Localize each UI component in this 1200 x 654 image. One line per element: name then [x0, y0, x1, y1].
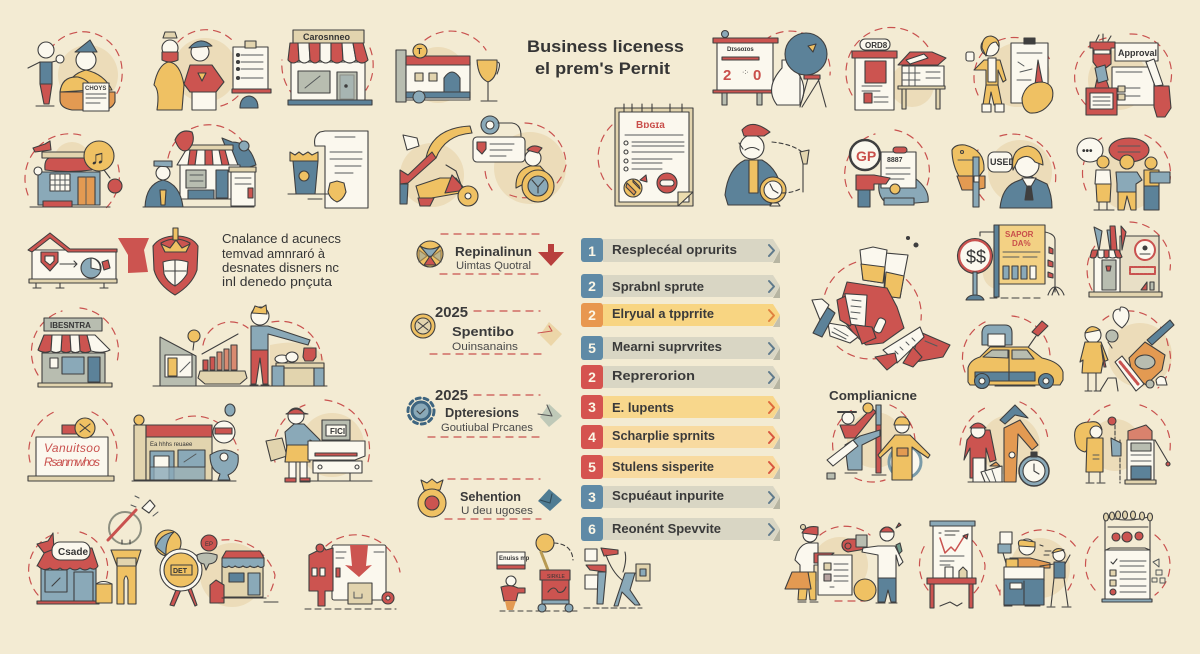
milestone 3: Goutiubal Prcanes — [441, 422, 534, 434]
icon: price sign and notice board: $$ — [966, 247, 986, 267]
icon: cyclist delivery with permit bubble and gear — [400, 116, 566, 207]
title: el prem's Pernit — [535, 60, 671, 78]
icon: growth chart and man at desk — [153, 305, 327, 387]
milestone 4: U deu ugoses — [461, 505, 534, 517]
item 3: 2 — [588, 307, 596, 323]
icon: billboard with flask and globe: Dɪsɢoɪos — [727, 47, 754, 53]
icon: price sign and notice board — [958, 225, 1064, 300]
icon: magnifier and document: 8887 — [887, 157, 903, 164]
milestone 1: Repinalinun — [455, 244, 532, 259]
icon: billboard with flask and globe: 2 — [723, 67, 731, 84]
icon: poster and market stall — [846, 27, 946, 110]
panel: milestones left column — [408, 234, 564, 519]
icon: poster and market stall: ORD8 — [865, 41, 888, 50]
icon: magnifier over yellow pillar — [108, 496, 158, 604]
icon: spiral notebook permit — [598, 104, 693, 206]
title — [527, 38, 684, 78]
icon: price sign and notice board: SAPOR — [1005, 230, 1034, 239]
item 4: Mearni suprvrites — [612, 339, 722, 354]
milestone 4 — [418, 479, 562, 519]
icon: price sign and notice board: DA% — [1012, 239, 1031, 248]
icon: consultant woman with bubble: USED — [990, 157, 1016, 167]
icon: approval paperwork — [1075, 34, 1172, 117]
icon: worker with orange arch and clock — [960, 402, 1049, 486]
item 8: Stulens sisperite — [612, 459, 714, 474]
icon: post office storefront with bust — [132, 404, 238, 481]
item 3 — [581, 303, 780, 327]
icon: clerk behind counter with child — [996, 530, 1078, 607]
item 9: Scpuéaut inpurite — [612, 488, 724, 503]
panel: numbered list — [581, 238, 780, 541]
item 5: 2 — [588, 369, 596, 385]
icon: crowned bin and checklist — [288, 131, 368, 208]
icon: magnifier and document — [845, 130, 929, 207]
item 7: 4 — [588, 429, 596, 445]
item 4: 5 — [588, 340, 596, 356]
milestone 2: Spentibo — [452, 324, 514, 339]
icon: shop with man and balloon — [143, 125, 256, 207]
icon: red kiosk with arrow and box — [305, 535, 400, 609]
icon: billboard with flask and globe: ·:· — [742, 69, 749, 76]
item 5 — [581, 365, 780, 389]
icon: worker and press machine — [266, 400, 372, 482]
item 1: Resplecéal oprurits — [612, 242, 737, 257]
text block: description: temvad amnraró à — [222, 246, 326, 261]
icon: target stand with shop: DET — [173, 568, 188, 575]
text block: description: inl denedo pnçuta — [222, 274, 333, 289]
milestone 3: Dpteresions — [445, 405, 519, 420]
milestone 2: 2025 — [435, 305, 468, 321]
icon: billboard with flask and globe — [713, 30, 830, 107]
icon: woman with arcade kiosk — [1075, 405, 1170, 484]
icon: shop trailer and goblet — [396, 31, 500, 103]
icon: person, cart and worker at the bottom — [497, 534, 650, 612]
text block: description: desnates disners nc — [222, 260, 340, 275]
icon: music shop — [25, 134, 122, 208]
icon: consultant woman with bubble — [952, 134, 1056, 208]
item 10: Reonént Spevvite — [612, 521, 721, 536]
icon: corner store: IBESNTRA — [50, 321, 91, 330]
item 6 — [581, 395, 780, 419]
icon: music shop: ♫ — [90, 147, 105, 169]
icon: person with clipboard and potato — [966, 36, 1053, 113]
icon: corner store — [31, 308, 118, 387]
milestone 1: Uimtas Quotral — [456, 260, 531, 272]
icon: person, cart and worker at the bottom: Enuiss mp — [499, 556, 530, 562]
text block: description — [222, 231, 341, 289]
milestone 1 — [417, 234, 564, 274]
icon: red script sign with crown: Rsanmwhos — [44, 455, 100, 469]
shield crest — [153, 228, 198, 295]
icon: storefront with sign: Carosnneo — [303, 32, 351, 42]
item 10 — [581, 517, 780, 541]
icon: trade shop: Csade — [58, 547, 88, 558]
icon: trade shop — [29, 532, 112, 604]
item 2: Sprabnl sprute — [612, 279, 704, 294]
milestone 3: 2025 — [435, 388, 468, 404]
title: Business liceness — [527, 38, 684, 56]
item 7 — [581, 425, 780, 449]
icon: man with clock and lamp — [725, 124, 809, 206]
icon: flip chart on red table — [919, 521, 985, 608]
icon: shop with emblem — [1087, 222, 1170, 297]
icon: spiral notebook permit: Bɒɢɪa — [636, 120, 665, 131]
icon: storefront with sign — [282, 30, 373, 105]
item 1: 1 — [588, 243, 596, 259]
icon: garland checklist document — [1085, 511, 1170, 602]
item 10: 6 — [588, 521, 596, 537]
item 9: 3 — [588, 489, 596, 505]
item 5: Reprerorion — [612, 368, 695, 383]
text block: description: Cnalance d acunecs — [222, 231, 341, 246]
item 2: 2 — [588, 278, 596, 294]
icon: approval paperwork: Approval — [1118, 48, 1157, 58]
icon: worker and press machine: FICI — [330, 427, 345, 436]
icon: red script sign with crown: Vanuitsoo — [44, 441, 100, 455]
icon: shopper and officer with document — [785, 523, 903, 603]
milestone 4: Sehention — [460, 489, 521, 504]
milestone 3 — [408, 388, 562, 437]
item 6: 3 — [588, 399, 596, 415]
item 1 — [581, 238, 780, 263]
icon: two workers with wheel and pole — [827, 403, 930, 482]
item 2 — [581, 274, 780, 298]
icon: billboard with flask and globe: 0 — [753, 67, 761, 84]
icon: woman and tool machine — [1080, 307, 1174, 391]
item 8: 5 — [588, 459, 596, 475]
item 4 — [581, 336, 780, 360]
milestone 2 — [411, 305, 562, 354]
milestone 2: Ouinsanains — [452, 341, 519, 353]
icon: three people with speech bubbles: ••• — [1082, 146, 1093, 157]
item 3: Elryual a tpprrite — [612, 306, 714, 321]
icon: officer with burger and document: CHOYS — [85, 86, 106, 92]
icon: shop trailer and goblet: T — [417, 47, 422, 56]
icon: three people with speech bubbles — [1077, 135, 1170, 210]
item 7: Scharplie sprnits — [612, 428, 715, 443]
item 8 — [581, 455, 780, 479]
icon: red script sign with crown — [28, 412, 117, 481]
icon: red gloved hand holding documents — [812, 236, 950, 370]
icon: house with shield and flag — [28, 228, 198, 295]
icon: person, cart and worker at the bottom: SIRKLE — [547, 574, 565, 580]
item 9 — [581, 485, 780, 509]
item 6: E. lupents — [612, 400, 674, 415]
icon: target stand with shop — [155, 530, 278, 607]
icon: post office storefront with bust: Ea hhhs reuaee — [150, 442, 193, 448]
icon: two people and clipboard — [154, 30, 271, 110]
icon: magnifier and document: GP — [856, 148, 876, 164]
icon: officer with burger and document — [28, 32, 122, 111]
heading: compliance: Complianicne — [829, 388, 917, 403]
icon: target stand with shop: EP — [205, 542, 213, 548]
icon: yellow car with luggage — [962, 316, 1063, 388]
